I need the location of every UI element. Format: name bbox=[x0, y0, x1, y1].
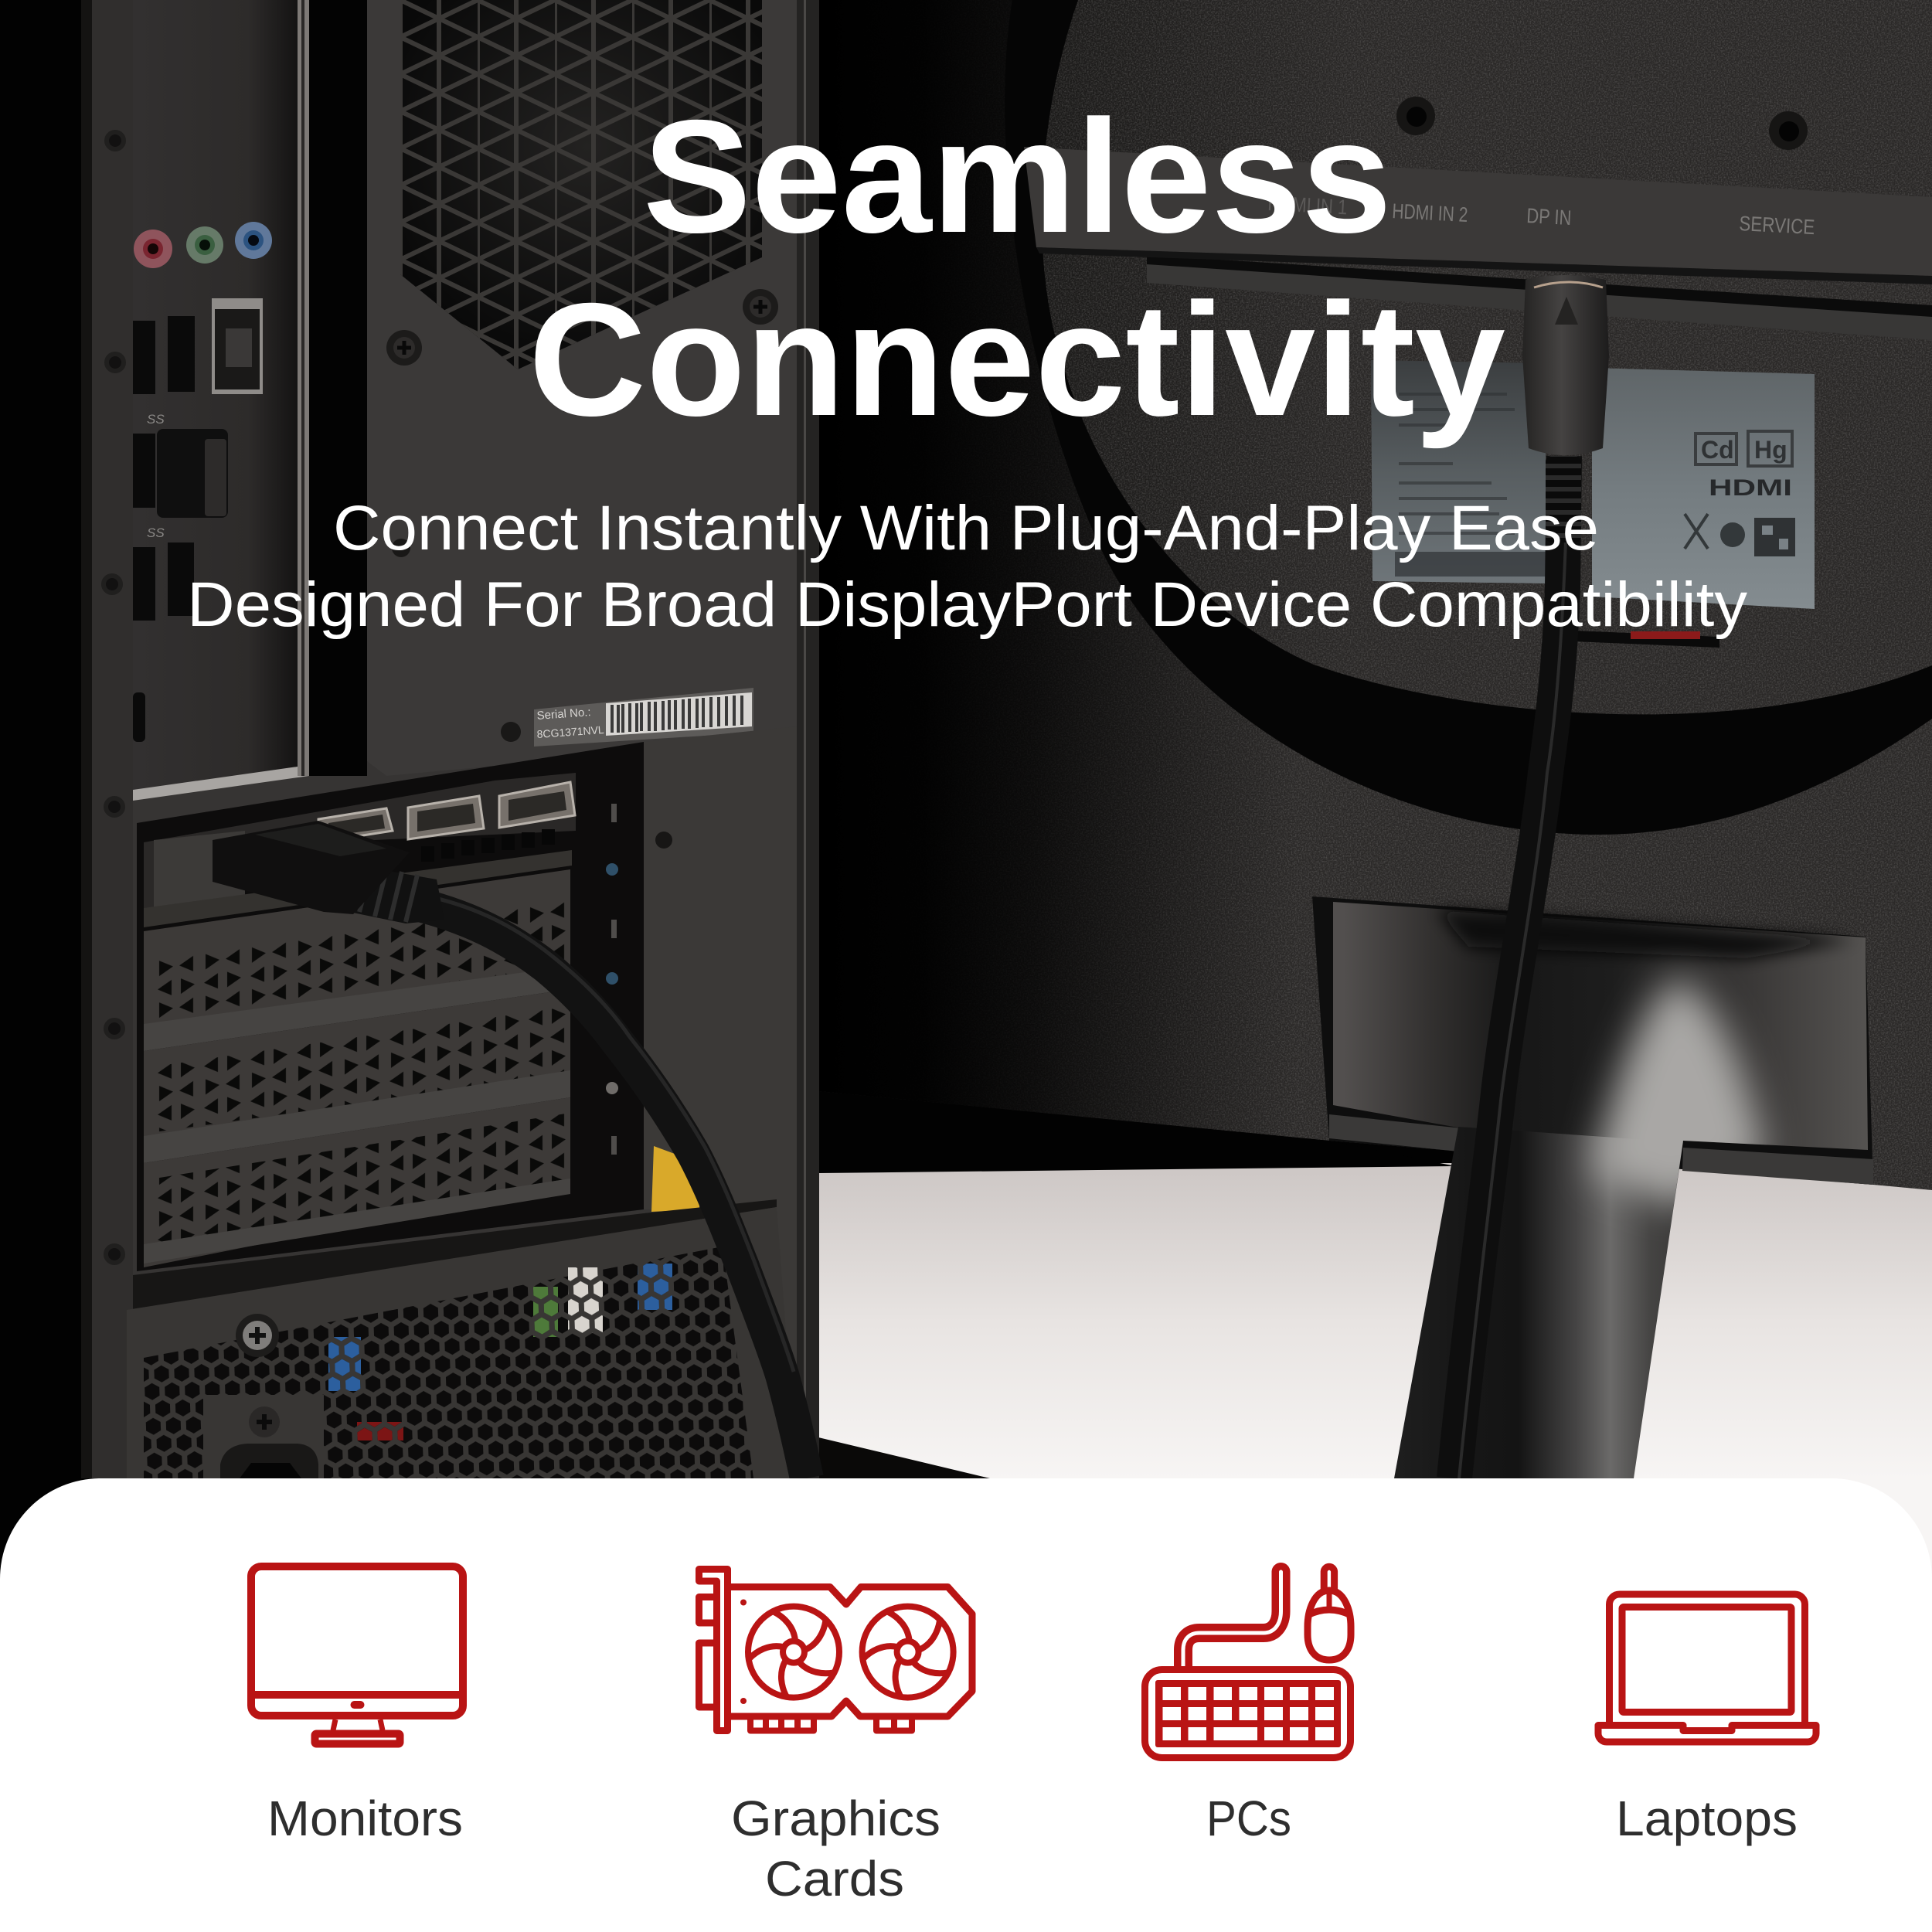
USB and network ports: SS bbox=[147, 412, 165, 427]
label: laptops: Laptops bbox=[1616, 1791, 1798, 1846]
USB and network ports bbox=[133, 298, 263, 742]
monitor side cable with DisplayPort plug bbox=[1454, 275, 1609, 1478]
cable from the graphics card bbox=[213, 821, 807, 1478]
title: Seamless bbox=[643, 87, 1392, 267]
graphics card bay bbox=[137, 742, 644, 1271]
monitor back bbox=[818, 0, 1932, 1190]
icon: monitor bbox=[247, 1566, 467, 1743]
rear I/O plate bbox=[133, 0, 309, 801]
serial number label bbox=[534, 688, 753, 747]
display output ports bbox=[318, 782, 575, 842]
USB and network ports: SS bbox=[147, 526, 165, 540]
card bracket cutout bbox=[154, 831, 245, 908]
PCI slot cover 1 bbox=[144, 869, 570, 1051]
PCI slot cover 2 bbox=[144, 989, 570, 1163]
upper case panel bbox=[367, 0, 797, 776]
monitor port strip: HDMI IN 2 bbox=[1392, 199, 1468, 226]
PCI slot cover 3 bbox=[144, 1097, 570, 1267]
bay to PSU recess bbox=[133, 1199, 777, 1310]
vent hole row bbox=[421, 829, 555, 862]
monitor port strip: HDMI IN 1 bbox=[1267, 192, 1348, 219]
fan vent grille bbox=[400, 0, 762, 369]
tower strip screw holes bbox=[104, 132, 124, 1263]
case screws bbox=[386, 289, 778, 742]
label: graphics cards: Cards bbox=[765, 1851, 904, 1906]
monitor rating labels: HDMI bbox=[1709, 475, 1792, 501]
monitor stand bbox=[1312, 896, 1873, 1478]
PSU hex mesh bbox=[144, 1247, 753, 1478]
colored PSU internals bbox=[328, 1264, 672, 1440]
panel: compatible devices bbox=[0, 1478, 1932, 1932]
monitor rating labels: Cd bbox=[1701, 436, 1734, 464]
icon: keyboard and mouse bbox=[1145, 1566, 1351, 1757]
monitor mount holes bbox=[1396, 97, 1808, 150]
monitor rating labels: Hg bbox=[1754, 436, 1787, 464]
monitor port strip: SERVICE bbox=[1739, 212, 1815, 239]
warning sticker bbox=[651, 1146, 699, 1212]
label: PCs: PCs bbox=[1206, 1791, 1291, 1846]
serial number label: 8CG1371NVL bbox=[536, 723, 604, 740]
subtitle bbox=[187, 493, 1747, 640]
icon: graphics card bbox=[699, 1569, 972, 1731]
table surface bbox=[818, 1163, 1932, 1658]
monitor inner disc bbox=[1042, 0, 1932, 714]
plug strain relief bbox=[349, 866, 444, 923]
card bracket screws bbox=[606, 804, 618, 1155]
monitor recess ring bbox=[1005, 0, 1932, 835]
icon: laptop bbox=[1598, 1594, 1816, 1742]
power supply plate bbox=[127, 1207, 797, 1478]
PSU solid area and screws bbox=[203, 1314, 324, 1478]
label: graphics cards: Graphics bbox=[731, 1791, 940, 1846]
subtitle: Designed For Broad DisplayPort Device Compatibility bbox=[187, 570, 1747, 640]
label: graphics cards bbox=[731, 1791, 940, 1906]
plug body bbox=[213, 821, 410, 914]
monitor port strip: DP IN bbox=[1526, 204, 1572, 230]
monitor rating labels bbox=[1371, 360, 1815, 648]
serial number label: Serial No.: bbox=[536, 706, 591, 723]
lower case panel bbox=[644, 726, 797, 1478]
PC tower bbox=[81, 0, 819, 1478]
title: Connectivity bbox=[529, 270, 1505, 450]
audio jacks bbox=[134, 222, 272, 268]
title bbox=[529, 87, 1505, 450]
monitor port strip bbox=[1024, 147, 1932, 340]
label: monitors: Monitors bbox=[267, 1791, 463, 1846]
subtitle: Connect Instantly With Plug-And-Play Ease bbox=[333, 493, 1599, 563]
